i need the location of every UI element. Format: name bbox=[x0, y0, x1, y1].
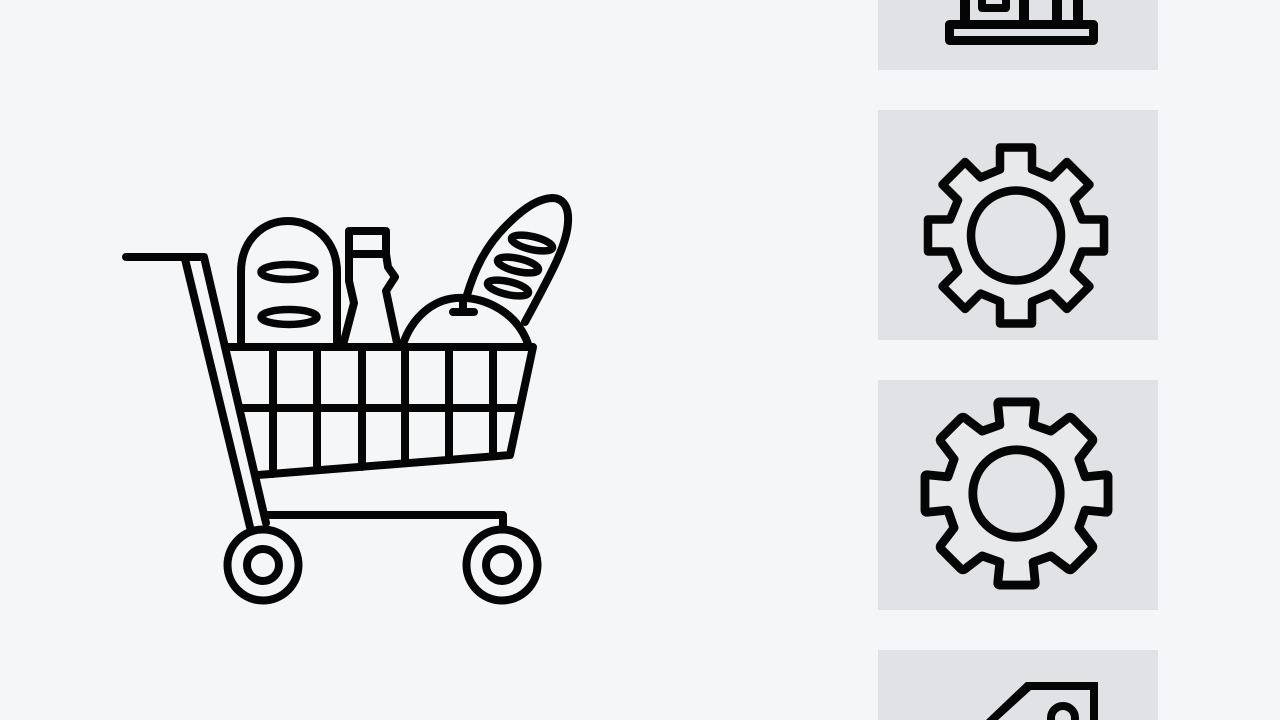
panel: top icon tile (cropped) bbox=[878, 0, 1158, 70]
icon: gear two bbox=[925, 402, 1108, 585]
icon: gear one bbox=[928, 148, 1104, 324]
baguette bbox=[467, 198, 568, 322]
icon: shopping cart with groceries bbox=[126, 198, 568, 600]
panel: gear tile two bbox=[878, 380, 1158, 610]
bottle bbox=[343, 231, 397, 345]
cart axle bbox=[268, 515, 503, 527]
icon: price tag bbox=[986, 682, 1098, 720]
icon: building base bbox=[950, 0, 1094, 40]
cart basket bbox=[226, 347, 533, 475]
bread loaf bbox=[241, 221, 337, 345]
panel: price tag tile (cropped) bbox=[878, 650, 1158, 720]
orange bbox=[403, 298, 528, 344]
cart handle and frame bbox=[126, 257, 266, 527]
left wheel bbox=[228, 530, 298, 600]
right wheel bbox=[466, 530, 538, 600]
panel: gear tile one bbox=[878, 110, 1158, 340]
